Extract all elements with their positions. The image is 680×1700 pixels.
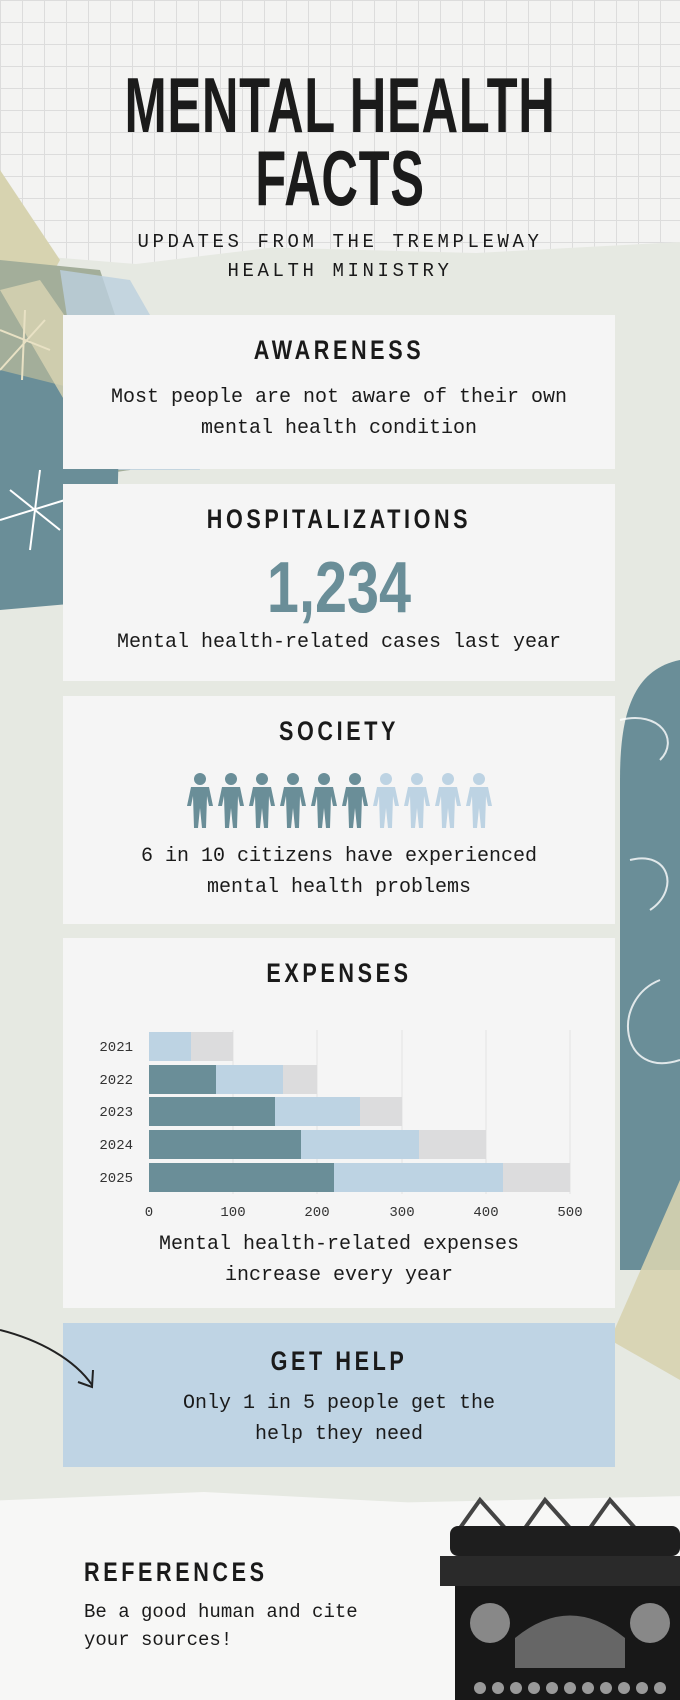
big number: 1,234 [267,548,411,628]
heading: awareness: AWARENESS [254,335,424,365]
text: get help [183,1392,495,1446]
heading: get help: GET HELP [271,1346,407,1376]
text: references: your sources! [84,1629,232,1651]
title: FACTS [255,134,425,222]
background grid paper [0,0,680,275]
title [125,61,555,222]
decoration: right teal shape [615,660,680,1380]
panel: society [63,696,615,924]
subtitle [137,231,543,282]
text: expenses: increase every year [225,1264,453,1287]
bar chart: 2022 [99,1073,133,1089]
text: references: Be a good human and cite [84,1601,358,1623]
text: expenses [159,1233,519,1287]
icon: typewriter [440,1496,680,1700]
heading: hospitalizations: HOSPITALIZATIONS [207,504,471,534]
bar chart: 2025 [99,1171,133,1187]
title: MENTAL HEALTH [125,61,555,149]
heading: references: REFERENCES [84,1557,268,1587]
icon: people chart [187,773,492,828]
bar chart: 500 [557,1205,583,1221]
panel: expenses [63,938,615,1308]
text: get help: Only 1 in 5 people get the [183,1392,495,1415]
heading: expenses: EXPENSES [266,958,412,988]
arrow [0,1329,94,1388]
bar chart: 2023 [99,1105,133,1121]
text: society [141,845,537,899]
bar chart: 2024 [99,1138,133,1154]
text: get help: help they need [255,1423,423,1446]
text: hospitalizations: Mental health-related cases last year [117,631,561,654]
bar chart [99,1030,583,1221]
text: expenses: Mental health-related expenses [159,1233,519,1256]
heading: society: SOCIETY [279,716,399,746]
bar chart: 200 [304,1205,330,1221]
decoration: left shapes [0,170,200,610]
text: awareness [111,386,567,440]
bar chart: 2021 [99,1040,133,1056]
panel: get help [63,1323,615,1467]
subtitle: HEALTH MINISTRY [227,260,453,282]
text: awareness: mental health condition [201,417,477,440]
text: references [84,1601,358,1651]
panel: awareness [63,315,615,469]
text: society: mental health problems [207,876,471,899]
bar chart: 300 [389,1205,415,1221]
panel: hospitalizations [63,484,615,681]
bar chart: 400 [473,1205,499,1221]
bar chart: 100 [220,1205,246,1221]
text: awareness: Most people are not aware of their own [111,386,567,409]
bar chart: 0 [145,1205,153,1221]
references background paper [0,1492,680,1700]
subtitle: UPDATES FROM THE TREMPLEWAY [137,231,543,253]
text: society: 6 in 10 citizens have experienced [141,845,537,868]
